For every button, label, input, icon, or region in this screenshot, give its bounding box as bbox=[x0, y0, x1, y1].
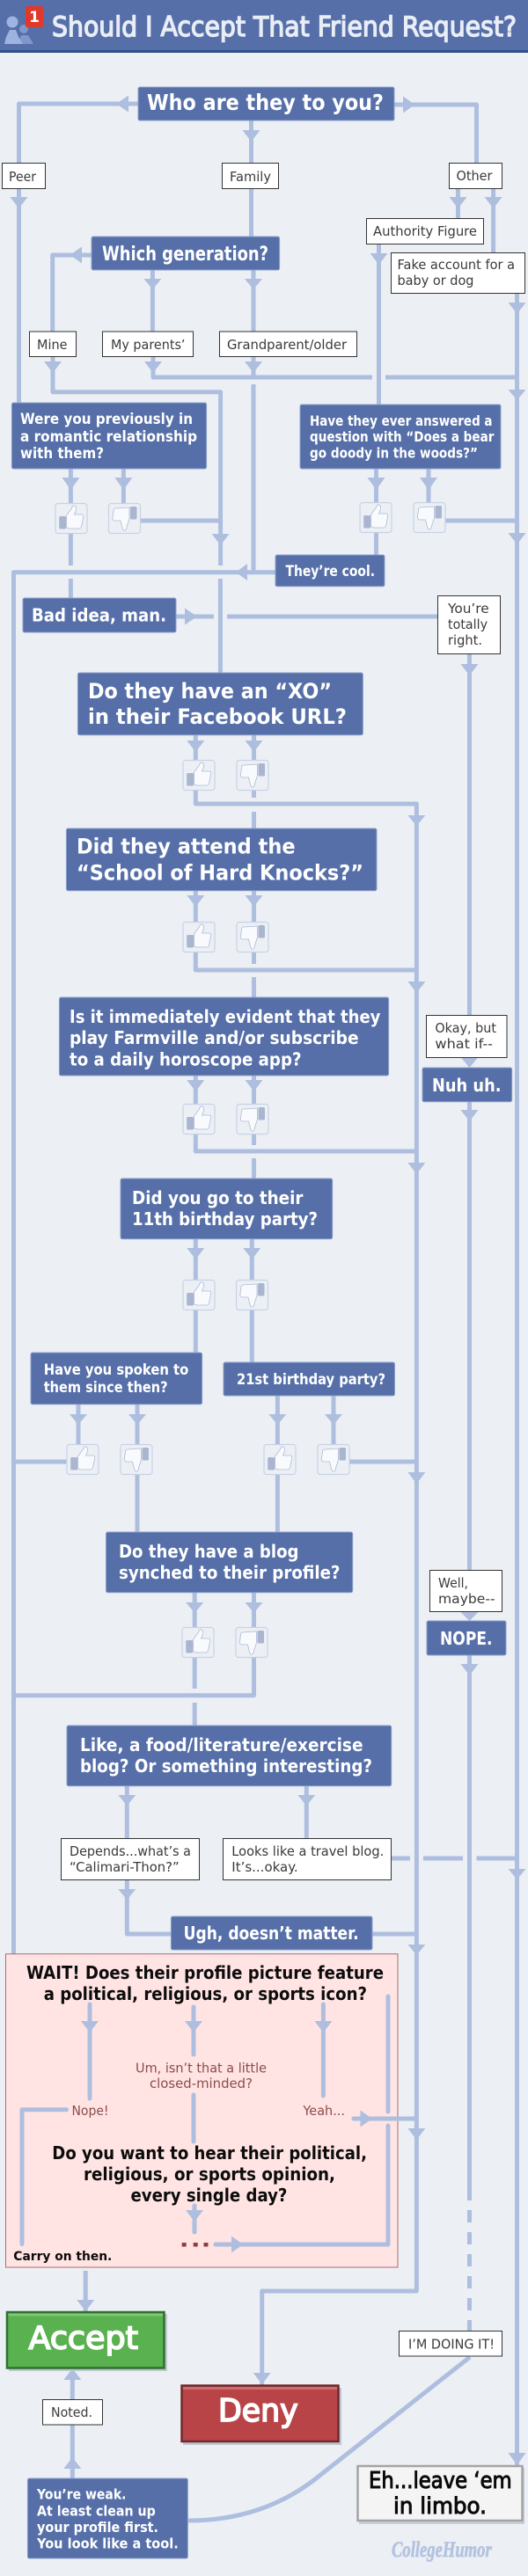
outcome: deny button: Deny bbox=[218, 2393, 298, 2429]
icon: thumbs farmville down bbox=[237, 1105, 268, 1135]
result: they're cool bbox=[275, 555, 385, 587]
label: fake account: baby or dog bbox=[398, 273, 473, 288]
icon: thumbs farmville up bbox=[183, 1105, 215, 1135]
question: romantic relationship: with them? bbox=[20, 445, 104, 463]
arrow: authority figure to bear question bbox=[370, 244, 387, 405]
arrow: bad idea to you're totally right bbox=[176, 609, 438, 624]
question: 11th birthday: 11th birthday party? bbox=[132, 1208, 318, 1230]
result: you're weak: your profile first. bbox=[37, 2519, 158, 2536]
question: which generation: Which generation? bbox=[102, 244, 268, 266]
arrow: blog thumb up to like question bbox=[193, 1657, 197, 1726]
panel heading: WAIT! Does their profile picture feature bbox=[26, 1962, 384, 1983]
outcome: deny button bbox=[181, 2385, 341, 2445]
label: peer: Peer bbox=[9, 169, 37, 185]
label: I'm doing it: I’M DOING IT! bbox=[408, 2337, 495, 2353]
label: my parents: My parents’ bbox=[111, 337, 185, 353]
panel heading: a political, religious, or sports icon? bbox=[44, 1983, 367, 2004]
question: who are they bbox=[138, 87, 394, 120]
answer: yeah: Yeah... bbox=[302, 2103, 345, 2119]
outcome: limbo button: Eh...leave ‘em bbox=[369, 2468, 512, 2494]
question: like a food blog bbox=[67, 1726, 392, 1786]
arrow: ellipsis to right side bbox=[216, 1996, 388, 2253]
result: you're weak: You’re weak. bbox=[36, 2486, 127, 2503]
arrow: I'm doing it curve to you're weak bbox=[188, 2357, 470, 2521]
label: other: Other bbox=[456, 168, 493, 184]
label: travel blog: It’s...okay. bbox=[231, 1859, 298, 1875]
result: you're weak bbox=[27, 2478, 187, 2558]
arrow: to nope bbox=[81, 2004, 99, 2098]
label: fake account: Fake account for a bbox=[398, 257, 515, 273]
label: family bbox=[222, 164, 278, 188]
arrow: who to family to generation bbox=[243, 120, 260, 237]
icon: thumbs school down bbox=[237, 922, 268, 952]
label: grandparent bbox=[220, 332, 357, 357]
question: spoken since: Have you spoken to bbox=[44, 1361, 188, 1379]
icon: thumbs bear up bbox=[360, 503, 392, 533]
arrow: you're totally right down through nuh uh and nope bbox=[461, 653, 479, 2332]
arrow: school thumb up to deny line bbox=[195, 952, 416, 970]
question: romantic relationship bbox=[11, 403, 207, 469]
question: like a food blog: blog? Or something interesting? bbox=[80, 1755, 372, 1777]
label: you're totally right: totally bbox=[448, 617, 488, 632]
question: XO URL bbox=[77, 673, 363, 735]
ellipsis dots bbox=[182, 2243, 208, 2246]
arrow: travel blog to limbo line bbox=[392, 1856, 517, 1861]
label: well maybe: Well, bbox=[438, 1575, 468, 1591]
arrow: they're cool down left edge to accept panel bbox=[14, 564, 275, 1954]
result: ugh doesn't matter: Ugh, doesn’t matter. bbox=[184, 1923, 359, 1944]
question: like a food blog: Like, a food/literature/exercise bbox=[80, 1734, 363, 1755]
result: nope bbox=[427, 1621, 506, 1655]
arrow: generation to my parents bbox=[143, 270, 161, 332]
arrow: XO thumb down to school question bbox=[252, 790, 256, 828]
icon: thumbs 21st up bbox=[264, 1444, 296, 1474]
label: okay but what if bbox=[426, 1015, 507, 1057]
arrow: XO thumb up to deny line bbox=[195, 790, 425, 2385]
label: authority figure bbox=[366, 218, 484, 244]
logo: collegehumor: CollegeHumor bbox=[392, 2538, 492, 2562]
arrow: spoken thumb up to accept line bbox=[14, 1460, 66, 1463]
icon: thumbs 21st down bbox=[318, 1444, 349, 1474]
arrow: ugh to deny line bbox=[372, 1931, 416, 1937]
question: school of hard knocks: Did they attend the bbox=[77, 835, 296, 859]
outcome: accept button: Accept bbox=[28, 2321, 138, 2357]
arrow: panel to accept bbox=[77, 2271, 94, 2311]
arrow: depends to ugh bbox=[118, 1879, 172, 1934]
arrow: closed-minded to opinion question bbox=[192, 2095, 195, 2142]
icon: friend request silhouettes with badge: 1 bbox=[29, 9, 40, 26]
question: romantic relationship: Were you previously in bbox=[20, 411, 193, 428]
answer: closed-minded: closed-minded? bbox=[150, 2076, 253, 2091]
result: you're weak: At least clean up bbox=[37, 2503, 156, 2520]
arrow: you're weak through noted to accept bbox=[63, 2368, 81, 2478]
question: 11th birthday: Did you go to their bbox=[132, 1187, 304, 1208]
question: XO URL: in their Facebook URL? bbox=[88, 704, 347, 729]
arrow: yeah to deny line bbox=[354, 2111, 416, 2127]
question: XO URL: Do they have an “XO” bbox=[88, 679, 332, 704]
panel heading bbox=[26, 1962, 384, 2004]
icon: thumbs spoken down bbox=[121, 1444, 152, 1474]
label: mine bbox=[30, 332, 76, 357]
arrow: blog thumb down to accept line bbox=[14, 1657, 253, 1696]
result: ugh doesn't matter bbox=[171, 1916, 372, 1950]
arrow: bear thumb up to they're cool bbox=[374, 533, 378, 555]
result: nuh uh: Nuh uh. bbox=[432, 1075, 502, 1096]
carry on then: Carry on then. bbox=[13, 2250, 112, 2264]
label: grandparent: Grandparent/older bbox=[227, 337, 348, 353]
label: fake account bbox=[391, 253, 524, 294]
question: romantic relationship: a romantic relationship bbox=[20, 428, 197, 446]
label: you're totally right: right. bbox=[448, 632, 482, 648]
arrow: 11th birthday to thumbs bbox=[187, 1239, 260, 1280]
label: well maybe: maybe-- bbox=[438, 1591, 495, 1607]
label: noted bbox=[42, 2399, 102, 2425]
question: does a bear bbox=[300, 405, 501, 469]
question: farmville bbox=[59, 997, 389, 1076]
label: okay but what if: Okay, but bbox=[435, 1020, 496, 1036]
label: I'm doing it bbox=[400, 2331, 502, 2356]
label: mine: Mine bbox=[37, 337, 67, 353]
question: 21st birthday bbox=[224, 1362, 394, 1396]
result: you're weak: You look like a tool. bbox=[36, 2536, 179, 2552]
label: well maybe bbox=[429, 1571, 502, 1611]
question: who are they: Who are they to you? bbox=[147, 90, 384, 115]
label: my parents bbox=[102, 332, 194, 357]
result: nope: NOPE. bbox=[440, 1628, 493, 1649]
label: noted: Noted. bbox=[51, 2405, 92, 2420]
arrow: thumb up to bad idea bbox=[69, 534, 73, 598]
arrow: like question to answers bbox=[118, 1786, 315, 1838]
label: travel blog bbox=[224, 1838, 391, 1880]
label: you're totally right: You’re bbox=[447, 601, 489, 617]
icon: thumbs 11th down bbox=[236, 1281, 268, 1310]
icon: thumbs spoken up bbox=[67, 1444, 99, 1474]
arrow: bear question to thumbs bbox=[368, 469, 437, 502]
answer: closed-minded: Um, isn’t that a little bbox=[136, 2061, 267, 2076]
result: bad idea: Bad idea, man. bbox=[32, 605, 166, 626]
arrow: school thumb down to farmville question bbox=[252, 952, 256, 997]
arrow: XO question to thumbs bbox=[187, 735, 262, 760]
arrow: generation to grandparent bbox=[245, 270, 262, 332]
arrow: mine onward to XO question bbox=[44, 356, 230, 673]
arrow: romantic question to thumbs bbox=[62, 469, 132, 503]
label: family: Family bbox=[230, 169, 271, 185]
icon: thumbs 11th up bbox=[183, 1281, 215, 1310]
arrow: to yeah bbox=[314, 2004, 332, 2096]
label: okay but what if: what if-- bbox=[435, 1036, 493, 1052]
label: you're totally right bbox=[438, 596, 500, 654]
result: they're cool: They’re cool. bbox=[285, 563, 375, 580]
answer: nope: Nope! bbox=[72, 2103, 109, 2119]
arrow: thumbs down to blog question bbox=[137, 1475, 277, 1532]
arrow: farmville thumb up to deny line bbox=[195, 1134, 416, 1151]
arrow: other to fake account bbox=[485, 188, 502, 253]
arrow: other to authority figure bbox=[449, 188, 466, 218]
arrow: blog question to thumbs bbox=[186, 1593, 262, 1628]
question: spoken since bbox=[31, 1353, 202, 1405]
question: does a bear: go doody in the woods?” bbox=[310, 445, 478, 462]
arrow: nope to carry on bbox=[22, 2110, 67, 2244]
arrow: who to peer to romantic question bbox=[11, 95, 138, 403]
opinion question: religious, or sports opinion, bbox=[84, 2164, 335, 2185]
question: blog synched: synched to their profile? bbox=[119, 1562, 340, 1583]
arrow: to closed-minded bbox=[185, 2007, 202, 2054]
question: does a bear: Have they ever answered a bbox=[310, 412, 493, 429]
question: blog synched: Do they have a blog bbox=[119, 1541, 299, 1562]
arrow: farmville thumb down to 11th birthday bbox=[252, 1134, 256, 1179]
icon: thumbs XO down bbox=[237, 760, 268, 790]
question: school of hard knocks: “School of Hard Knocks?” bbox=[77, 861, 363, 886]
icon: thumbs blog up bbox=[182, 1627, 214, 1657]
header banner bbox=[0, 0, 528, 53]
icon: thumbs romantic down bbox=[109, 503, 141, 533]
question: school of hard knocks bbox=[66, 828, 377, 891]
panel: wait profile picture bbox=[5, 1954, 416, 2267]
answer: closed-minded bbox=[136, 2061, 267, 2091]
arrow: 21st birthday to thumbs bbox=[268, 1396, 342, 1444]
outcome: accept button bbox=[7, 2312, 167, 2371]
question: does a bear: question with “Does a bear bbox=[310, 428, 494, 445]
question: farmville: play Farmville and/or subscribe bbox=[70, 1027, 359, 1048]
question: blog synched bbox=[106, 1532, 353, 1593]
question: 21st birthday: 21st birthday party? bbox=[237, 1371, 385, 1389]
question: farmville: to a daily horoscope app? bbox=[70, 1049, 301, 1070]
label: travel blog: Looks like a travel blog. bbox=[231, 1843, 384, 1859]
icon: thumbs bear down bbox=[414, 503, 445, 533]
opinion question: Do you want to hear their political, bbox=[52, 2142, 367, 2164]
result: bad idea bbox=[23, 598, 176, 632]
arrow: parents across to limbo line bbox=[144, 356, 517, 377]
arrow: 21st thumb down to deny line bbox=[349, 1460, 416, 1463]
label: calimari-thon bbox=[62, 1838, 199, 1880]
label: calimari-thon: “Calimari-Thon?” bbox=[70, 1859, 180, 1875]
icon: thumbs romantic up bbox=[55, 503, 87, 533]
question: farmville: Is it immediately evident that they bbox=[70, 1006, 380, 1027]
question: 11th birthday bbox=[121, 1179, 333, 1239]
arrow: fake account down to limbo bbox=[509, 293, 526, 2465]
label: peer bbox=[2, 164, 46, 188]
label: authority figure: Authority Figure bbox=[373, 223, 477, 239]
icon: thumbs school up bbox=[183, 922, 215, 952]
arrow: farmville question to thumbs bbox=[187, 1076, 262, 1104]
icon: friend request silhouettes with badge bbox=[4, 6, 43, 44]
arrow: school question to thumbs bbox=[187, 891, 262, 922]
icon: thumbs XO up bbox=[183, 760, 215, 790]
opinion question bbox=[52, 2142, 367, 2206]
label: calimari-thon: Depends...what’s a bbox=[70, 1843, 191, 1859]
arrow: generation to mine bbox=[53, 246, 92, 332]
label: other bbox=[449, 164, 502, 188]
arrow: thumb down to main line bbox=[141, 519, 221, 522]
icon: thumbs blog down bbox=[236, 1627, 268, 1657]
arrow: grandparent down to cool line bbox=[245, 356, 262, 572]
question: spoken since: them since then? bbox=[44, 1379, 168, 1397]
outcome: limbo button: in limbo. bbox=[393, 2493, 487, 2520]
arrow: bear thumb down to limbo line bbox=[445, 519, 517, 522]
arrow: 11th thumbs to follow-up questions bbox=[195, 1310, 252, 1362]
outcome: limbo button bbox=[357, 2466, 524, 2524]
arrow: question to ellipsis bbox=[186, 2206, 203, 2232]
opinion question: every single day? bbox=[130, 2185, 287, 2206]
question: which generation bbox=[92, 237, 280, 270]
arrow: who to other bbox=[394, 97, 477, 164]
arrow: spoken question to thumbs bbox=[70, 1405, 146, 1444]
result: nuh uh bbox=[422, 1068, 512, 1102]
